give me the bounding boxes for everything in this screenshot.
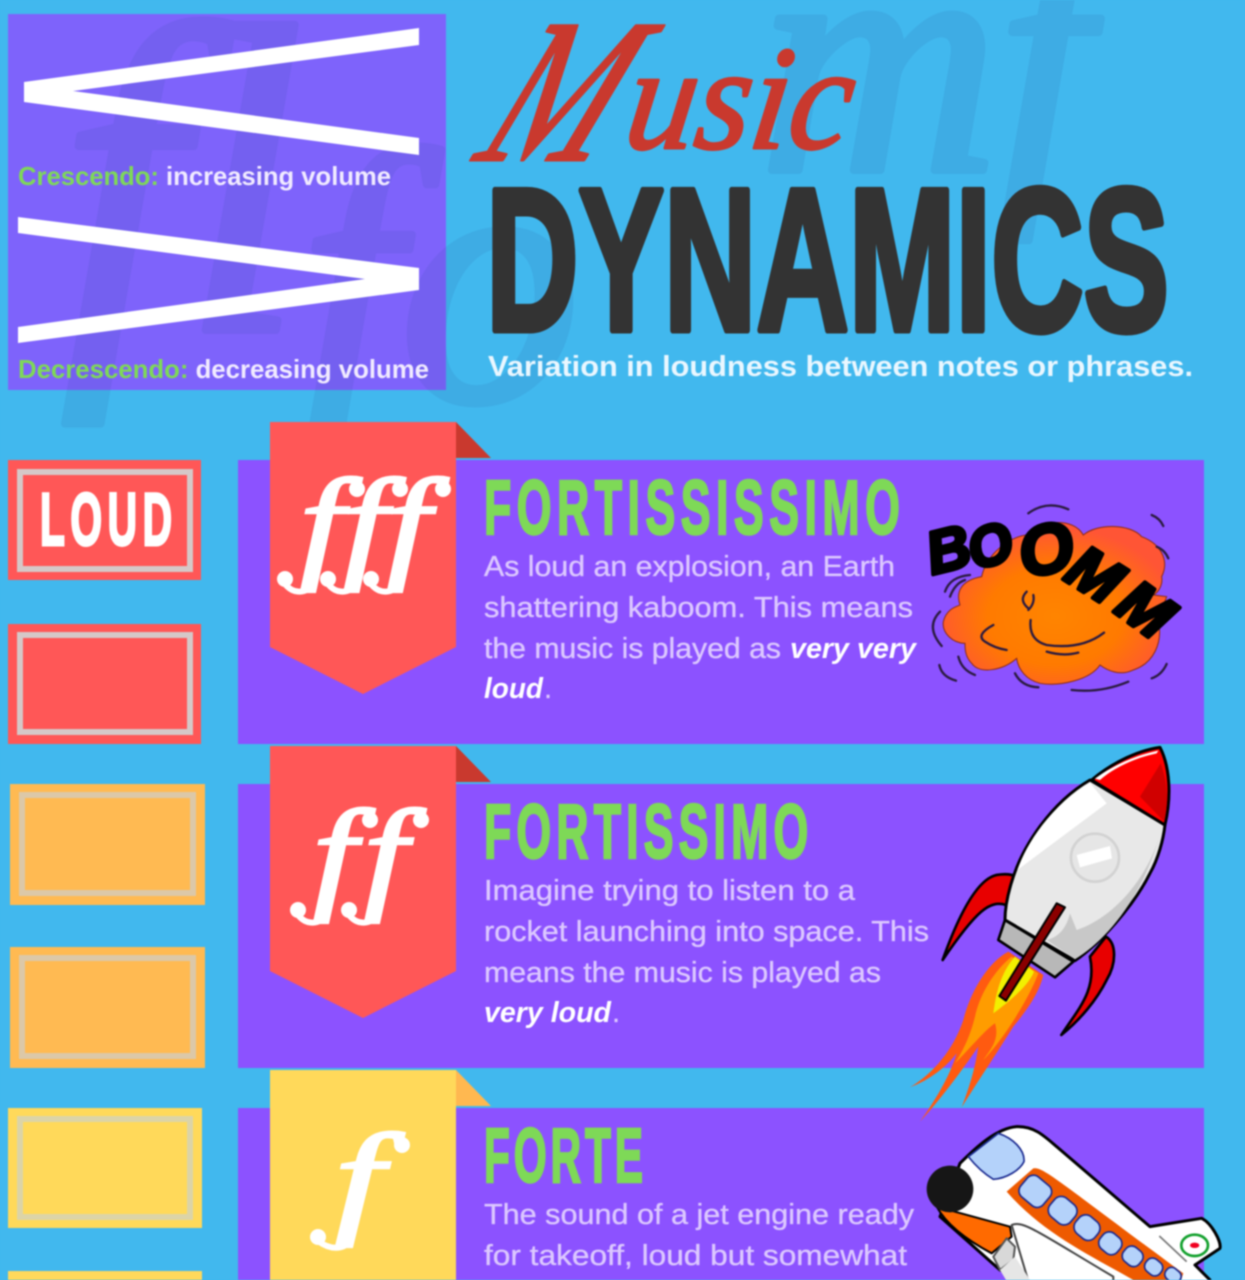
icon: crescendo hairpin: [24, 28, 419, 155]
heading: FORTISSIMO: [484, 789, 808, 875]
icon: decrescendo hairpin: [18, 217, 419, 343]
description: shattering kaboom. This means: [484, 592, 913, 624]
panel: crescendo and decrescendo: [18, 28, 429, 384]
description: .: [612, 997, 620, 1029]
icon: rocket: [910, 747, 1169, 1122]
heading: FORTISSISSIMO: [484, 465, 900, 551]
title: Music: [449, 0, 865, 205]
ribbon: fff: fff: [300, 454, 449, 592]
ribbon fold: [456, 1070, 491, 1106]
boom lettering: O: [960, 510, 1020, 583]
description: The sound of a jet engine ready: [484, 1199, 915, 1231]
crescendo panel background: [8, 14, 446, 390]
description: [484, 875, 929, 1029]
ribbon: fff: [270, 422, 456, 694]
description: very loud: [484, 997, 612, 1029]
description: .: [544, 673, 552, 705]
heading: FORTE: [484, 1114, 643, 1199]
rocket flame: [910, 952, 1043, 1122]
boom lettering: B: [919, 512, 977, 587]
description: loud: [484, 673, 544, 705]
icon: boom explosion: [919, 505, 1188, 691]
boom lettering: [919, 506, 1188, 654]
subtitle: Variation in loudness between notes or phrases.: [488, 351, 1193, 383]
background watermark lettering: [60, 0, 1132, 479]
title: Music: usic: [617, 17, 865, 181]
meter block: yellow upper: [8, 1108, 202, 1228]
ribbon: ff: ff: [313, 785, 426, 923]
decrescendo label: Decrescendo: decreasing volume: [18, 354, 429, 384]
description: [484, 1199, 915, 1272]
icon: airplane: [927, 1127, 1220, 1280]
description: rocket launching into space. This: [484, 916, 929, 948]
meter block: yellow lower: [8, 1271, 202, 1280]
meter block: red: [8, 624, 201, 744]
description: As loud an explosion, an Earth: [484, 551, 895, 583]
loud label: LOUD: [40, 478, 172, 561]
meter block: loud: [8, 460, 201, 580]
description: very very: [790, 633, 918, 665]
meter block: orange upper: [10, 784, 205, 905]
ribbon: f: [270, 1070, 456, 1280]
boom lettering: O: [1012, 506, 1079, 592]
description: means the music is played as: [484, 957, 881, 989]
ribbon: f: f: [335, 1108, 404, 1247]
ribbon: ff: [270, 746, 456, 1018]
ribbon fold: [456, 422, 491, 458]
background watermark lettering: fo: [300, 79, 580, 479]
description: [484, 551, 918, 705]
meter block: orange lower: [10, 947, 205, 1068]
crescendo label: Crescendo: increasing volume: [18, 161, 391, 191]
description: for takeoff, loud but somewhat: [484, 1240, 907, 1272]
panel: fortissimo: [238, 746, 1204, 1068]
panel: fortississimo: [238, 422, 1204, 744]
ribbon fold: [456, 746, 491, 782]
volume meter: [8, 460, 205, 1280]
description: Imagine trying to listen to a: [484, 875, 856, 907]
boom lettering: M: [1104, 567, 1188, 654]
description: the music is played as: [484, 633, 781, 665]
panel: forte: [238, 1070, 1204, 1280]
boom lettering: M: [1054, 532, 1136, 619]
